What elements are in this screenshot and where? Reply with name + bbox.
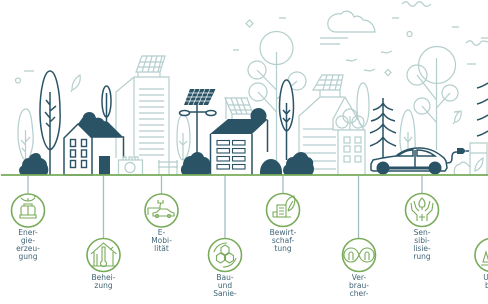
cloud: [328, 11, 375, 32]
item: Sensibilisierung: rung: [413, 252, 431, 261]
background sky decorations: [16, 2, 488, 83]
item: Bau und Sanierung: und: [218, 281, 232, 290]
big light trees: [248, 32, 461, 175]
item: Bau und Sanierung: Sanie-: [213, 289, 237, 298]
green ground line: [1, 174, 488, 176]
item: Beheizung: zung: [94, 281, 113, 290]
item: Sensibilisierung: sibi-: [414, 236, 430, 245]
house with dark roof: [64, 112, 124, 175]
dark tree centre: [280, 80, 294, 160]
bush at lamp: [181, 152, 211, 175]
light house on right with panel: [299, 75, 364, 175]
item: Umwelt cut off at edge: [475, 238, 488, 290]
battery box: [118, 157, 142, 175]
item: Energieerzeugung: [12, 194, 44, 261]
bush right of centre: [283, 152, 314, 175]
item: Energieerzeugung: erzeu-: [16, 244, 40, 253]
item: Verbraucher: [342, 238, 376, 298]
light solar panel on building: [225, 98, 253, 119]
dark arcs on right edge: [477, 83, 488, 136]
item: Energieerzeugung: Ener-: [18, 228, 38, 237]
light tower with solar panel: [116, 56, 169, 175]
charging plug and cable: [446, 148, 469, 163]
item: E-Mobilität: Mobi-: [151, 236, 172, 245]
item: E-Mobilität: [145, 194, 178, 253]
charging station: [454, 143, 487, 175]
light bench: [158, 160, 178, 175]
solar street lamp: [180, 89, 216, 155]
round bush: [260, 159, 282, 175]
item: Bewirtschaftung: tung: [274, 244, 292, 253]
item: Sensibilisierung: [406, 194, 438, 261]
light tree by lamp: [177, 115, 190, 160]
item: Verbraucher: cher-: [350, 289, 369, 298]
fir tree: [370, 98, 396, 158]
light small house: [338, 130, 365, 175]
item: Beheizung: Behei-: [92, 273, 116, 282]
item: Energieerzeugung: gie-: [21, 236, 35, 245]
item: Bewirtschaftung: [266, 194, 300, 253]
item: E-Mobilität: E-: [158, 228, 166, 237]
item: Sensibilisierung: lisie-: [413, 244, 431, 253]
item: Energieerzeugung: gung: [18, 252, 38, 261]
electric car: [371, 148, 447, 174]
dark bush left: [19, 153, 48, 175]
item: Bau und Sanierung: Bau-: [216, 273, 234, 282]
leaf left: [71, 75, 80, 92]
timeline stems: [28, 176, 422, 239]
light tree left: [18, 109, 33, 165]
item: Beheizung: [87, 238, 120, 290]
item: Verbraucher: brau-: [349, 281, 369, 290]
item: Sensibilisierung: Sen-: [414, 228, 431, 237]
item: Bau und Sanierung: [208, 238, 242, 298]
tall dark tree: [40, 71, 60, 175]
light slim trees: [357, 83, 415, 160]
item: E-Mobilität: lität: [154, 244, 169, 253]
dark roof apartment building: [210, 108, 268, 175]
item: Bewirtschaftung: Bewirt-: [270, 228, 297, 237]
item: Verbraucher: Ver-: [352, 273, 367, 282]
small dark tree: [102, 86, 111, 125]
item: Bewirtschaftung: schaf-: [272, 236, 294, 245]
